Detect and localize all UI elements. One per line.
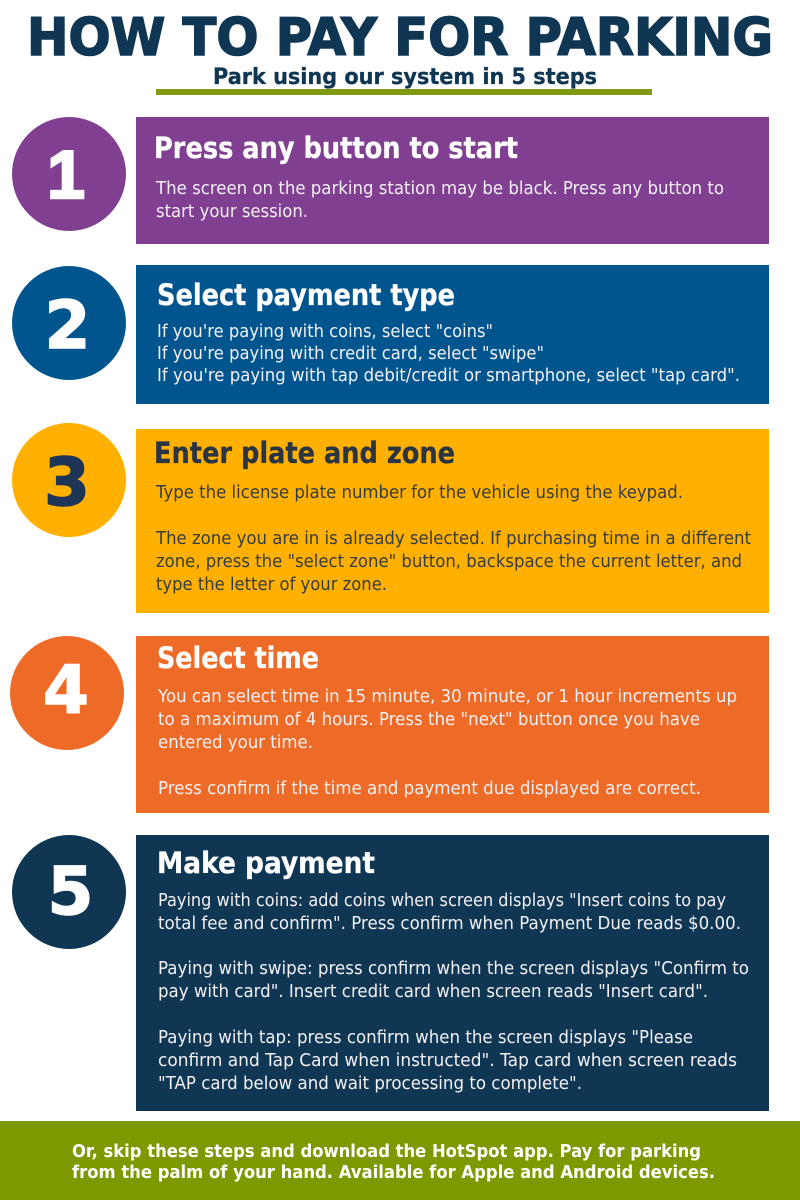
footer text: from the palm of your hand. Available for Apple and Android devices.	[72, 1162, 715, 1183]
heading: step 4: Select time	[157, 641, 319, 675]
number badge 4	[10, 636, 124, 750]
text: step 3 body: zone, press the "select zone" button, backspace the current letter, and	[156, 551, 742, 572]
text: step 5 body: Paying with swipe: press confirm when the screen displays "Confirm to	[158, 958, 749, 979]
text: step 2 body: If you're paying with tap debit/credit or smartphone, select "tap card".	[157, 365, 740, 386]
step 1	[12, 117, 769, 244]
heading: step 2: Select payment type	[157, 278, 455, 312]
panel: step 5	[136, 835, 769, 1111]
text: step 4 body: to a maximum of 4 hours. Press the "next" button once you have	[158, 709, 700, 730]
number badge 2	[12, 266, 126, 380]
footer text: Or, skip these steps and download the HotSpot app. Pay for parking	[72, 1141, 701, 1162]
step 5	[12, 835, 769, 1111]
text: step 4 body: You can select time in 15 minute, 30 minute, or 1 hour increments up	[157, 686, 737, 707]
number badge 1: 1	[47, 137, 85, 213]
heading: step 3: Enter plate and zone	[154, 436, 455, 470]
text: step 3 body: Type the license plate number for the vehicle using the keypad.	[155, 482, 683, 503]
text: step 3 body: The zone you are in is already selected. If purchasing time in a different	[155, 528, 751, 549]
text: step 5 body	[158, 890, 749, 1094]
text: step 3 body: type the letter of your zone.	[156, 574, 387, 595]
panel: step 2	[136, 265, 769, 404]
footer banner	[0, 1121, 800, 1200]
number badge 3: 3	[44, 444, 90, 521]
number badge 4: 4	[43, 652, 89, 729]
text: step 4 body: Press confirm if the time and payment due displayed are correct.	[158, 778, 701, 799]
text: step 5 body: confirm and Tap Card when instructed". Tap card when screen reads	[158, 1050, 737, 1071]
heading: step 5: Make payment	[157, 846, 375, 880]
panel: step 4	[136, 636, 769, 813]
text: step 1 body: start your session.	[156, 201, 308, 222]
number badge 5: 5	[48, 853, 93, 930]
step 4	[10, 636, 769, 813]
subtitle: Park using our system in 5 steps	[213, 65, 597, 90]
heading: step 1: Press any button to start	[154, 131, 518, 165]
step 2	[12, 265, 769, 404]
text: step 2 body: If you're paying with credit card, select "swipe"	[157, 343, 544, 364]
title underline	[156, 89, 652, 95]
number badge 3	[12, 423, 126, 537]
footer text	[72, 1141, 715, 1183]
text: step 5 body: total fee and confirm". Press confirm when Payment Due reads $0.00.	[158, 913, 741, 934]
text: step 5 body: "TAP card below and wait processing to complete".	[158, 1073, 582, 1094]
text: step 4 body	[157, 686, 737, 799]
text: step 3 body	[155, 482, 751, 595]
text: step 4 body: entered your time.	[158, 732, 313, 753]
text: step 5 body: pay with card". Insert credit card when screen reads "Insert card".	[158, 981, 708, 1002]
panel: step 1	[136, 117, 769, 244]
number badge 1	[12, 117, 126, 231]
text: step 1 body: The screen on the parking station may be black. Press any button to	[155, 178, 724, 199]
text: step 2 body	[157, 321, 740, 386]
number badge 2: 2	[45, 287, 90, 364]
step 3	[12, 423, 769, 613]
number badge 5	[12, 835, 126, 949]
text: step 5 body: Paying with coins: add coins when screen displays "Insert coins to pay	[158, 890, 726, 911]
text: step 2 body: If you're paying with coins, select "coins"	[157, 321, 493, 342]
panel: step 3	[136, 429, 769, 613]
text: step 1 body	[155, 178, 724, 222]
text: step 5 body: Paying with tap: press confirm when the screen displays "Please	[158, 1027, 693, 1048]
title: HOW TO PAY FOR PARKING	[27, 8, 773, 68]
